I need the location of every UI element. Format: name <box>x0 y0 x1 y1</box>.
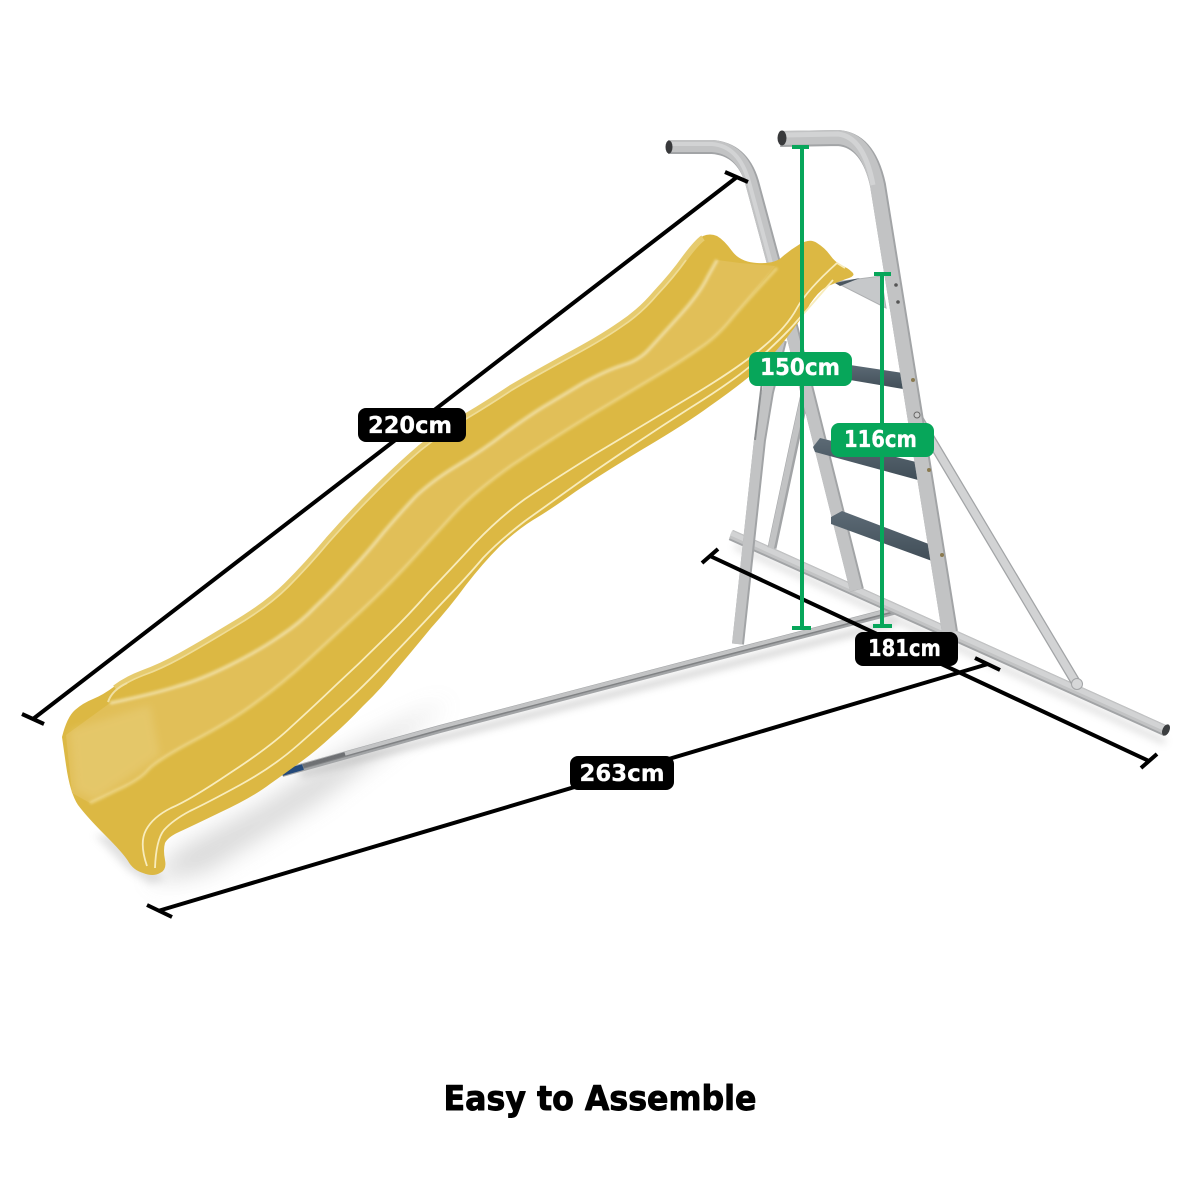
dimension: platform height 116cm: 116cm <box>844 425 917 453</box>
bottom step <box>831 511 934 561</box>
flange line two <box>155 280 833 868</box>
chute highlight streak <box>110 260 717 703</box>
dimension: overall length 263cm <box>147 658 1000 917</box>
left leg <box>737 340 781 644</box>
middle step <box>813 438 920 480</box>
dimension: overall length 263cm: 263cm <box>580 759 664 787</box>
dimension: handrail height 150cm: 150cm <box>760 353 840 381</box>
slide tail wedge edge <box>108 683 127 702</box>
back handrail <box>666 140 857 590</box>
upper edge highlight <box>116 260 686 690</box>
dimension: width 181cm: 181cm <box>868 634 941 662</box>
inner support strut <box>771 390 806 548</box>
long base bar <box>731 533 1172 737</box>
platform dark strip <box>835 278 860 286</box>
yellow slide <box>62 234 854 875</box>
slide tail light patch <box>70 705 160 800</box>
steel platform plate <box>835 276 886 308</box>
chute lighter surface <box>66 260 775 803</box>
ground shadows <box>95 546 1165 884</box>
top step <box>850 365 903 389</box>
dimension: handrail height 150cm <box>749 147 852 628</box>
steps <box>813 365 934 561</box>
front handrail <box>778 130 950 632</box>
dimension: slide length 220cm: 220cm <box>368 411 452 439</box>
ground rail under slide <box>282 609 897 773</box>
dimension: slide length 220cm <box>22 172 748 724</box>
upper edge band <box>115 238 703 688</box>
dimension: width 181cm <box>702 549 1157 768</box>
dimension: platform height 116cm <box>831 274 934 626</box>
flange line one <box>143 263 845 866</box>
rear diagonal brace <box>918 418 1082 690</box>
chute lower ridge <box>90 268 777 803</box>
title: Easy to Assemble <box>444 1079 756 1119</box>
